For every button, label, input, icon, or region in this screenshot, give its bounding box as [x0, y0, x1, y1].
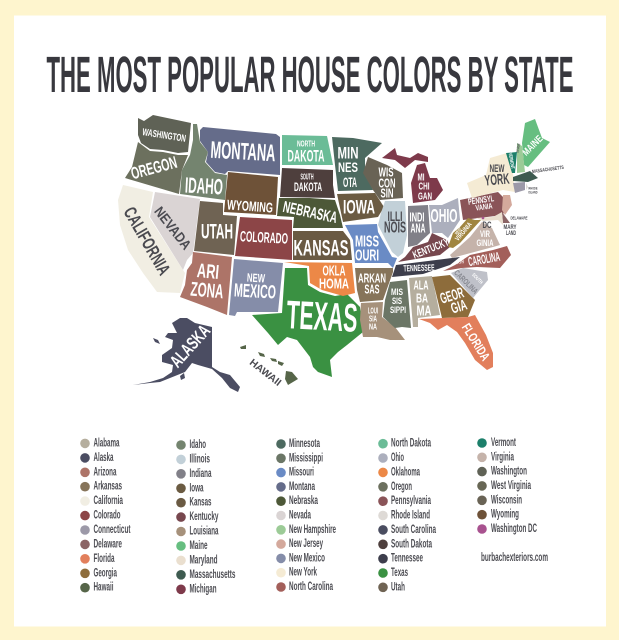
- legend: Maine: Maine: [190, 540, 208, 552]
- legend: Oklahoma: [378, 466, 420, 478]
- state: Rhode Island: RHODE: [528, 186, 538, 190]
- legend: New Jersey: New Jersey: [289, 538, 323, 550]
- legend column 1: [80, 437, 131, 594]
- state: Mississippi: SIPPI: [390, 305, 406, 315]
- legend: New York: [276, 567, 317, 579]
- legend: Maryland: [176, 554, 218, 566]
- state: Nevada: NEVADA: [151, 203, 195, 253]
- state: North Carolina: NORTH: [452, 259, 464, 267]
- legend: Alabama: Alabama: [94, 437, 120, 449]
- legend: Arkansas: Arkansas: [94, 481, 122, 493]
- legend: Connecticut: Connecticut: [94, 524, 131, 536]
- legend: Wisconsin: Wisconsin: [491, 494, 522, 506]
- state: California: [118, 185, 185, 293]
- state: Maine: [521, 119, 550, 167]
- map of the United States: NEW HAMPSHIRE: [515, 143, 521, 153]
- state: Minnesota: OTA: [343, 174, 357, 190]
- legend: Georgia: Georgia: [94, 567, 117, 579]
- state: Oklahoma: [284, 262, 355, 296]
- state: Massachusetts: MASSACHUSETTS: [532, 165, 565, 175]
- legend: Hawaii: [80, 582, 114, 594]
- legend: Kentucky: Kentucky: [190, 511, 219, 523]
- legend: New Mexico: [276, 552, 325, 564]
- state: Ohio: [429, 198, 460, 238]
- state: Virginia: VIR: [480, 229, 490, 239]
- state: Idaho: [180, 124, 227, 200]
- state: Pennsylvania: [460, 192, 505, 220]
- state: Montana: [200, 127, 280, 175]
- state: Pennsylvania: PENNSYL: [467, 193, 495, 207]
- legend: Illinois: Illinois: [190, 453, 210, 465]
- legend: Iowa: [176, 482, 204, 494]
- legend: South Dakota: South Dakota: [391, 538, 432, 550]
- state: Nevada: [150, 192, 200, 270]
- state: Arkansas: SAS: [364, 282, 380, 296]
- legend: Kentucky: [176, 511, 219, 523]
- map of the United States: [118, 115, 565, 392]
- state: Hawaii: HAWAII: [247, 357, 283, 389]
- state: Minnesota: NES: [338, 159, 358, 175]
- legend: Pennsylvania: [378, 495, 431, 507]
- state: Alabama: BA: [416, 290, 428, 306]
- state: Texas: TEXAS: [285, 293, 359, 341]
- state: Kentucky: KENTUCKY: [411, 236, 451, 262]
- legend: Louisiana: Louisiana: [190, 526, 219, 538]
- state: Louisiana: LOUI: [368, 306, 378, 316]
- state: North Dakota: DAKOTA: [287, 146, 325, 166]
- state: North Dakota: NORTH: [297, 140, 315, 148]
- state: New York: YORK: [484, 170, 510, 190]
- state: Delaware: [502, 212, 528, 223]
- state: Montana: MONTANA: [210, 137, 276, 167]
- state: Wisconsin: SIN: [381, 186, 393, 200]
- legend: South Carolina: [378, 524, 436, 536]
- legend: Illinois: [176, 453, 210, 465]
- state: Georgia: [432, 275, 475, 318]
- state: Washington DC: [482, 217, 492, 230]
- state: Virginia: GINIA: [476, 238, 494, 248]
- legend: Utah: Utah: [391, 581, 405, 593]
- state: West Virginia: WEST: [454, 226, 463, 236]
- legend: Mississippi: Mississippi: [289, 452, 323, 464]
- legend: North Carolina: [276, 581, 333, 593]
- state: Wyoming: WYOMING: [226, 196, 274, 216]
- state: Louisiana: [360, 302, 405, 340]
- state: Illinois: NOIS: [384, 220, 406, 236]
- legend: Maine: [176, 540, 208, 552]
- state: Delaware: DELAWARE: [510, 216, 528, 220]
- state: Missouri: MISS: [355, 234, 379, 250]
- state: Utah: UTAH: [201, 220, 233, 244]
- legend: Louisiana: [176, 526, 219, 538]
- legend: Ohio: [378, 452, 404, 464]
- state: Oregon: [125, 142, 188, 194]
- legend: Idaho: Idaho: [190, 439, 206, 451]
- legend: Oregon: Oregon: [391, 481, 412, 493]
- legend: Alaska: Alaska: [94, 452, 114, 464]
- state: Michigan: MI: [418, 172, 425, 184]
- legend: Iowa: Iowa: [190, 482, 204, 494]
- state: South Dakota: [280, 168, 335, 198]
- state: Maryland: LAND: [506, 231, 516, 237]
- legend: Arkansas: [80, 481, 122, 493]
- state: New Jersey: [502, 195, 512, 215]
- state: Pennsylvania: VANIA: [475, 201, 493, 213]
- state: North Dakota: [282, 135, 333, 166]
- state: Nebraska: [277, 198, 343, 228]
- state: Missouri: [345, 224, 397, 268]
- legend column 4: [378, 438, 436, 593]
- legend: Georgia: [80, 567, 117, 579]
- state: Minnesota: MIN: [338, 144, 358, 162]
- state: Virginia: [450, 222, 500, 258]
- legend: Kansas: Kansas: [190, 497, 212, 509]
- state: Vermont: VERMONT: [507, 153, 515, 169]
- state: New Mexico: MEXICO: [233, 280, 277, 304]
- state: Wisconsin: [363, 157, 403, 200]
- state: North Carolina: [443, 246, 511, 271]
- state: Tennessee: TENNESSEE: [403, 262, 435, 274]
- legend: Arizona: Arizona: [94, 466, 117, 478]
- state: Washington: WASHINGTON: [141, 127, 187, 145]
- state: Mississippi: [383, 280, 411, 328]
- legend: Washington DC: Washington DC: [491, 523, 537, 535]
- state: South Dakota: SOUTH: [300, 172, 314, 182]
- state: Michigan: CHI: [418, 182, 430, 192]
- legend: North Dakota: North Dakota: [391, 438, 431, 450]
- state: Nebraska: NEBRASKA: [281, 199, 339, 227]
- state: Arkansas: ARKAN: [358, 270, 386, 286]
- state: Massachusetts: [513, 165, 565, 182]
- state: Minnesota: [332, 137, 382, 191]
- legend: New Mexico: New Mexico: [289, 552, 325, 564]
- state: Alabama: ALA: [414, 278, 429, 292]
- legend: South Dakota: [378, 538, 432, 550]
- state: Michigan: [382, 148, 443, 203]
- legend: New Hampshire: New Hampshire: [289, 524, 336, 536]
- legend: Missouri: [276, 467, 314, 479]
- state: Florida: [419, 315, 493, 370]
- state: Louisiana: NA: [369, 322, 377, 332]
- legend: Delaware: [80, 538, 122, 550]
- state: California: CALIFORNIA: [120, 204, 174, 278]
- legend: Nebraska: [276, 495, 318, 507]
- state: Iowa: [337, 193, 384, 222]
- state: Kansas: [293, 231, 352, 260]
- state: Washington DC: DC: [482, 220, 492, 230]
- state: Tennessee: [392, 257, 460, 277]
- legend: Oregon: [378, 481, 412, 493]
- state: Maine: MAINE: [521, 133, 546, 158]
- state: Indiana: INDI: [410, 210, 424, 224]
- legend: Minnesota: Minnesota: [289, 438, 320, 450]
- legend: Connecticut: [80, 524, 131, 536]
- state: Hawaii: [240, 345, 298, 389]
- legend: Nevada: Nevada: [289, 510, 311, 522]
- state: Colorado: [235, 217, 292, 260]
- state: West Virginia: VIRGINIA: [454, 221, 474, 243]
- legend: Arizona: [80, 466, 117, 478]
- state: Oregon: OREGON: [129, 153, 179, 183]
- legend: Pennsylvania: Pennsylvania: [391, 495, 431, 507]
- legend: Virginia: Virginia: [491, 451, 514, 463]
- state: Kentucky: [398, 233, 451, 262]
- legend: Texas: Texas: [391, 567, 408, 579]
- legend: Wyoming: Wyoming: [491, 509, 519, 521]
- legend: Utah: [378, 581, 405, 593]
- state: Rhode Island: ISLAND: [528, 190, 538, 194]
- state: North Carolina: CAROLINA: [467, 249, 501, 269]
- legend: Rhode Island: Rhode Island: [391, 510, 430, 522]
- state: Arizona: [180, 252, 232, 315]
- state: Illinois: ILLI: [388, 208, 402, 224]
- state: South Carolina: CAROLINA: [452, 268, 480, 296]
- legend: Minnesota: [276, 438, 320, 450]
- state: Oklahoma: OKLA: [322, 262, 346, 280]
- state: Alaska: ALASKA: [166, 321, 214, 371]
- state: Arizona: ZONA: [190, 279, 224, 303]
- legend: Idaho: [176, 439, 206, 451]
- state: Texas: [252, 268, 363, 377]
- state: New Mexico: [229, 259, 283, 316]
- state: New York: [467, 153, 515, 198]
- state: Mississippi: SIS: [392, 296, 402, 306]
- legend: Oklahoma: Oklahoma: [391, 466, 420, 478]
- legend: Vermont: Vermont: [491, 437, 516, 449]
- state: Iowa: IOWA: [343, 198, 375, 218]
- legend: North Dakota: [378, 438, 431, 450]
- legend: North Carolina: North Carolina: [289, 581, 333, 593]
- state: Missouri: OURI: [355, 248, 379, 264]
- legend: New York: New York: [289, 567, 317, 579]
- state: South Carolina: SOUTH: [470, 272, 484, 286]
- state: Mississippi: MIS: [391, 287, 403, 297]
- legend: Indiana: Indiana: [190, 468, 212, 480]
- legend: Florida: [80, 553, 115, 565]
- state: West Virginia: [448, 218, 481, 248]
- legend: New Hampshire: [276, 524, 336, 536]
- state: Georgia: GEOR: [438, 284, 466, 308]
- state: South Dakota: DAKOTA: [294, 180, 322, 194]
- legend: Colorado: Colorado: [94, 510, 120, 522]
- legend: Missouri: Missouri: [289, 467, 314, 479]
- state: New Hampshire: [515, 143, 525, 173]
- legend column 4: Ohio: [391, 452, 404, 464]
- legend: Alabama: [80, 437, 120, 449]
- state: Michigan: GAN: [418, 192, 432, 202]
- legend: Indiana: [176, 468, 212, 480]
- state: Alabama: MA: [416, 302, 432, 320]
- legend: Texas: [378, 567, 408, 579]
- legend: Montana: Montana: [289, 481, 315, 493]
- state: Maryland: MARY: [504, 225, 516, 231]
- state: Maryland: [476, 212, 516, 237]
- legend: California: [80, 495, 123, 507]
- legend: Rhode Island: [378, 510, 430, 522]
- state: Florida: FLORIDA: [459, 321, 493, 364]
- state: New York: NEW: [490, 163, 505, 175]
- state: Louisiana: SIA: [369, 314, 377, 324]
- legend: Hawaii: Hawaii: [94, 582, 114, 594]
- legend: Michigan: Michigan: [190, 583, 216, 595]
- legend: Maryland: Maryland: [190, 554, 218, 566]
- legend: Kansas: [176, 497, 212, 509]
- legend: Massachusetts: Massachusetts: [190, 569, 236, 581]
- legend: New Jersey: [276, 538, 323, 550]
- state: Utah: [194, 201, 237, 255]
- legend column 2: [176, 439, 236, 595]
- legend: Florida: Florida: [94, 553, 115, 565]
- legend: Colorado: [80, 510, 120, 522]
- state: Washington: [138, 115, 191, 153]
- legend: Mississippi: [276, 452, 323, 464]
- state: Idaho: IDAHO: [184, 173, 224, 199]
- legend: West Virginia: West Virginia: [491, 480, 531, 492]
- state: Indiana: ANA: [410, 220, 426, 236]
- website credit: burbachexteriors.com: [481, 552, 548, 564]
- state: Arkansas: [355, 268, 393, 302]
- state: Wisconsin: WIS: [378, 164, 394, 180]
- legend: South Carolina: South Carolina: [391, 524, 436, 536]
- state: Connecticut: [513, 182, 525, 193]
- state: Rhode Island: [526, 183, 538, 194]
- state: Ohio: OHIO: [430, 206, 458, 226]
- state: Illinois: [378, 201, 407, 257]
- legend column 5: [477, 437, 537, 535]
- legend: Massachusetts: [176, 569, 236, 581]
- legend: Michigan: [176, 583, 216, 595]
- legend: Tennessee: Tennessee: [391, 553, 423, 565]
- legend: Washington: Washington: [491, 466, 527, 478]
- legend: Montana: [276, 481, 315, 493]
- legend: California: California: [94, 495, 123, 507]
- state: Georgia: GIA: [449, 297, 469, 317]
- state: Indiana: [408, 205, 430, 247]
- legend: Delaware: Delaware: [94, 538, 122, 550]
- state: Oklahoma: HOMA: [319, 276, 349, 292]
- state: Alabama: [409, 276, 440, 327]
- state: Kansas: KANSAS: [293, 236, 349, 260]
- legend: Nebraska: Nebraska: [289, 495, 318, 507]
- legend column 3: [276, 438, 336, 593]
- state: Wyoming: [224, 172, 278, 216]
- legend: Nevada: [276, 510, 311, 522]
- state: Colorado: COLORADO: [240, 228, 289, 248]
- legend: Tennessee: [378, 553, 423, 565]
- state: Alaska: [133, 318, 240, 392]
- state: New Mexico: NEW: [247, 271, 266, 285]
- legend: Alaska: [80, 452, 114, 464]
- state: Arizona: ARI: [196, 260, 220, 284]
- state: Wisconsin: CON: [378, 176, 396, 190]
